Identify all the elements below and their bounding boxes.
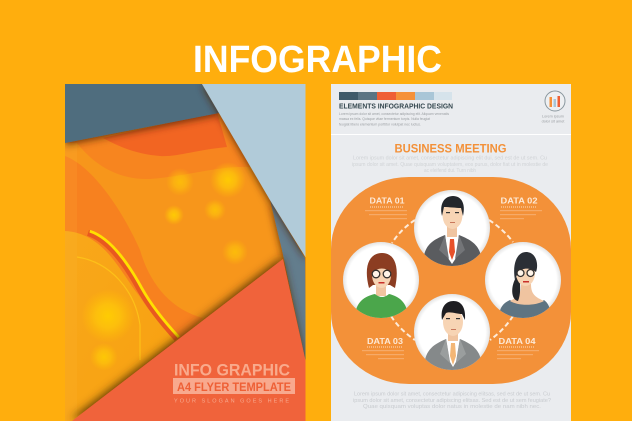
- left spine strip: [65, 143, 77, 421]
- header text: feugiat libero elementum porttitor volutpat nec luctus.: [339, 122, 421, 126]
- portrait: man with red tie: [414, 190, 490, 266]
- header text: Lorem ipsum dolor sit amet, consectetur adipiscing elit. Aliquam venenatis: [339, 111, 449, 116]
- cover headline: INFO GRAPHIC: [174, 360, 290, 380]
- slate top panel: [65, 84, 219, 143]
- icon caption: [542, 114, 565, 124]
- wave: mid orange: [65, 110, 250, 179]
- stripe: yellow: [90, 231, 179, 337]
- slate wedge right: [270, 200, 306, 363]
- header divider: [331, 134, 571, 135]
- intro text: Lorem ipsum dolor sit amet, consectetur adipiscing elit dui, sed est de ut sem. Cu: [353, 156, 547, 162]
- label: data 04: DATA 04: [498, 336, 536, 346]
- wave: top red-orange: [103, 112, 227, 156]
- panel: orange rounded shape: [331, 177, 571, 384]
- footer text: Lorem ipsum dolor sit amet, consectetur adipiscing elitsas, sed est de ut sem. Cu: [354, 392, 550, 398]
- portrait: man with orange tie: [414, 294, 490, 370]
- label: data 04: [497, 336, 539, 359]
- heading: BUSINESS MEETING: [394, 142, 506, 156]
- stripe: red: [88, 233, 177, 339]
- icon caption: dolor sit amet: [542, 120, 565, 124]
- footer text: Quae quisquam voluptas dolor natus in molestie de nam nibh nec.: [363, 404, 541, 410]
- connector dashes: [391, 220, 513, 340]
- light blue panel: [202, 84, 306, 258]
- icon: chart badge: [545, 91, 565, 111]
- wave: left arc: [65, 156, 203, 340]
- portrait: woman in green: [343, 242, 419, 318]
- cover subheadline: A4 FLYER TEMPLATE: [177, 380, 291, 394]
- header text: [339, 111, 449, 126]
- lower left yellow region: [65, 231, 178, 421]
- intro text: ipsum dolor sit amet. Quae quisquam voluptatem, eos purus, dolor fiat ut in molestie de: [352, 162, 548, 168]
- label: data 03: DATA 03: [367, 336, 403, 346]
- panel: flyer cover: [65, 84, 306, 421]
- label: data 03: [362, 336, 404, 359]
- intro text: ac eleifend dui. Turn nibh: [424, 168, 476, 174]
- portrait: woman in slate: [485, 242, 561, 318]
- cover band: [173, 378, 295, 394]
- colour bars: [339, 92, 452, 100]
- thin arc: [77, 257, 140, 360]
- footer text: ipsum dolor sit amet, consectetur adipiscing elitsas. Sed est de ut sem feugiate?: [353, 398, 551, 404]
- label: data 01: [365, 196, 407, 219]
- intro text: [352, 156, 548, 174]
- header title: ELEMENTS INFOGRAPHIC DESIGN: [339, 104, 453, 110]
- label: data 01: DATA 01: [370, 196, 405, 206]
- panel: flyer page: [331, 84, 571, 421]
- label: data 02: DATA 02: [500, 196, 538, 206]
- glow spots: [81, 162, 248, 371]
- cover slogan: YOUR SLOGAN GOES HERE: [174, 398, 289, 404]
- title: INFOGRAPHIC: [193, 39, 442, 81]
- icon caption: Lorem ipsum: [542, 114, 564, 118]
- footer text: [353, 392, 551, 410]
- header text: massa ex felis. Quisque vitae fermentum turpis. Nulla feugiat: [339, 116, 431, 121]
- red-orange triangle: [72, 259, 306, 421]
- label: data 02: [500, 196, 542, 219]
